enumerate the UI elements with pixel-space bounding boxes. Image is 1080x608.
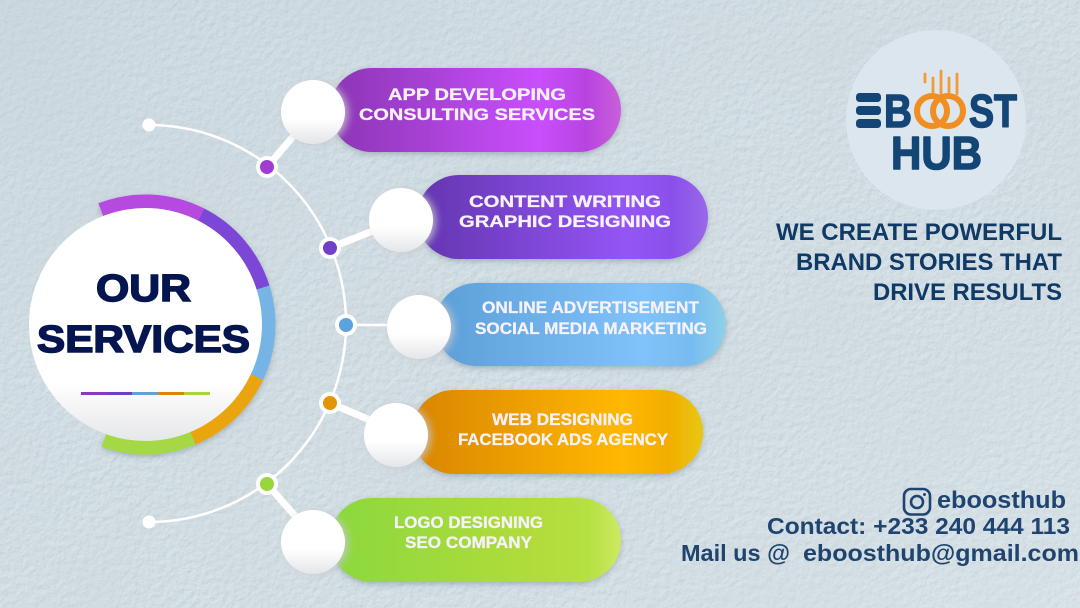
tagline: DRIVE RESULTS: [873, 279, 1062, 306]
pill 1 text: APP DEVELOPING: [388, 85, 566, 104]
contact details: Mail us @: [681, 540, 790, 566]
service 4: web designing: [319, 390, 703, 474]
pill 5: [330, 498, 621, 582]
service 2: content writing: [319, 175, 708, 259]
logo wordmark: B: [884, 85, 912, 137]
connector 4: [330, 403, 372, 421]
pill 2: [417, 175, 708, 259]
contact details: eboosthub@gmail.com: [803, 540, 1079, 566]
icon circle 5: [281, 510, 345, 574]
connector 1: [267, 133, 296, 167]
icon circle 1: [281, 80, 345, 144]
logo equalizer lines: [925, 71, 957, 96]
pill 3 text: SOCIAL MEDIA MARKETING: [475, 319, 707, 338]
tagline: [776, 219, 1062, 306]
node 2: [319, 237, 341, 259]
node 4: [319, 392, 341, 414]
contact details: eboosthub: [937, 487, 1066, 514]
logo wordmark: HUB: [891, 127, 982, 179]
curved connector line: [149, 125, 346, 522]
service 5: logo designing: [256, 473, 621, 582]
pill 4 text: FACEBOOK ADS AGENCY: [458, 430, 669, 449]
service 1: app developing: [256, 68, 621, 178]
connector 3: [346, 324, 392, 326]
colour underline: [81, 392, 210, 395]
pill 3 text: [475, 298, 707, 338]
heading: our services: OUR: [96, 268, 191, 310]
pill 4 text: WEB DESIGNING: [492, 410, 633, 429]
tagline: BRAND STORIES THAT: [796, 249, 1062, 276]
icon circle 2: [369, 188, 433, 252]
pill 4 text: [458, 410, 669, 449]
logo badge: [846, 30, 1026, 210]
pill 3 text: ONLINE ADVERTISEMENT: [482, 298, 700, 317]
pill 1: [330, 68, 621, 152]
logo wordmark: ST: [969, 85, 1017, 137]
logo wordmark: [884, 85, 1017, 179]
segmented colour ring: [101, 201, 268, 448]
pill 5 text: LOGO DESIGNING: [394, 513, 543, 532]
logo bars: [856, 93, 881, 128]
tagline: WE CREATE POWERFUL: [776, 219, 1062, 246]
icon circle 4: [364, 403, 428, 467]
icon circle 3: [387, 295, 451, 359]
pill 2 text: CONTENT WRITING: [469, 192, 661, 211]
pill 3: [435, 283, 726, 366]
pill 4: [412, 390, 703, 474]
central circle: our services: [29, 208, 262, 441]
connector 2: [330, 230, 375, 248]
contact details: Contact: +233 240 444 113: [767, 513, 1070, 539]
pill 5 text: [394, 513, 543, 552]
node 1: [256, 156, 278, 178]
heading: our services: SERVICES: [37, 319, 250, 361]
pill 5 text: SEO COMPANY: [405, 533, 533, 552]
node 3: [335, 314, 357, 336]
pill 2 text: [459, 192, 671, 231]
arc end point: [142, 516, 156, 528]
logo rings: [917, 96, 963, 126]
connector 5: [267, 484, 296, 517]
pill 1 text: [359, 85, 595, 124]
node 5: [256, 473, 278, 495]
service 3: online advertisement: [335, 283, 726, 366]
pill 2 text: GRAPHIC DESIGNING: [459, 212, 671, 231]
arc start point: [142, 118, 156, 132]
heading: our services: [37, 268, 250, 361]
icon: instagram: [904, 489, 930, 514]
pill 1 text: CONSULTING SERVICES: [359, 105, 595, 124]
contact details: [681, 487, 1079, 566]
